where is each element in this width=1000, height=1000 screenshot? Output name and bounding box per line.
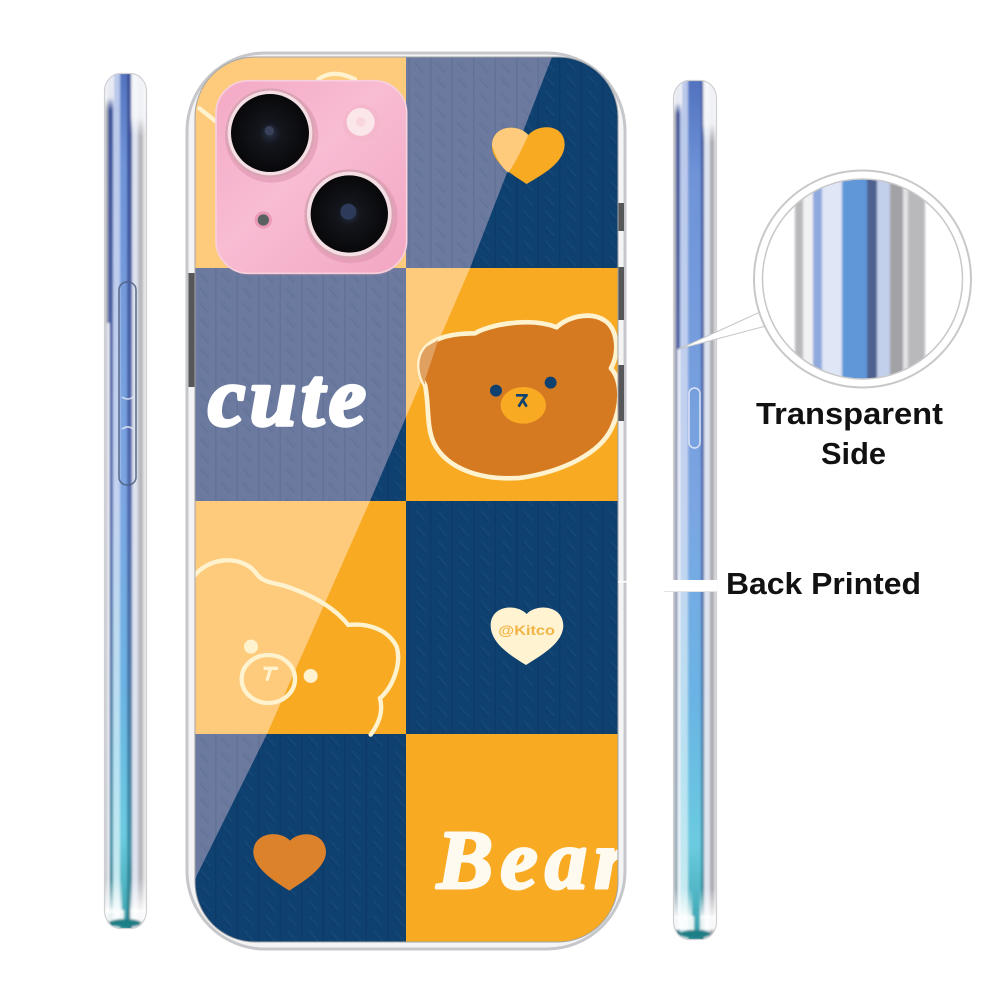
- heart: Kitco badge: @Kitco: [498, 622, 555, 638]
- snout ring: [242, 655, 295, 703]
- eyes: [490, 377, 557, 397]
- bear head face: [419, 316, 619, 478]
- cell: top right navy knit: [470, 58, 618, 268]
- camera module: [216, 81, 407, 275]
- flash: [343, 105, 380, 142]
- nose: [516, 395, 527, 407]
- glare tint on bear: [419, 340, 438, 385]
- cell: row two right orange: [406, 268, 618, 501]
- label: Transparent Side: Side: [821, 436, 886, 471]
- lens: secondary: [304, 169, 398, 263]
- printed back panel: [194, 57, 628, 942]
- cell: bottom left navy knit: [195, 734, 406, 942]
- module shadow: [217, 85, 406, 275]
- bear outline lower left: [194, 560, 398, 735]
- phone case frame: [187, 53, 625, 949]
- word: cute: cute: [208, 351, 366, 444]
- cell: top left orange: [195, 57, 406, 268]
- word: Bear: Bear: [436, 814, 628, 907]
- bear ear peeking behind camera: [199, 74, 355, 123]
- label: Back Printed: Back Printed: [726, 566, 921, 601]
- cell: row three left orange: [267, 501, 406, 734]
- cell: bottom right orange: [406, 734, 618, 942]
- side button: [689, 388, 700, 448]
- label: Transparent Side: [756, 396, 943, 471]
- label: Transparent Side: Transparent: [756, 396, 943, 431]
- print edge line: [195, 57, 618, 942]
- eyes: [244, 640, 318, 683]
- cell: row two left navy knit: [370, 417, 406, 501]
- frame buttons: [188, 203, 624, 421]
- cell: row three right navy knit: [406, 501, 618, 734]
- magnified stripes: [795, 170, 925, 390]
- callout: magnified transparent side: [679, 170, 971, 390]
- right side view of case: [672, 80, 718, 940]
- left side view of case: [104, 72, 148, 930]
- volume buttons: [119, 282, 136, 485]
- glossy diagonal reflection: [196, 58, 552, 878]
- heart: Kitco badge: [491, 607, 563, 665]
- lens: main: [225, 88, 318, 183]
- callout pointer: [679, 312, 766, 349]
- nose: [265, 668, 277, 679]
- arrow: back printed leader: [618, 580, 717, 592]
- snout: [501, 387, 546, 424]
- heart: brown bottom left: [253, 834, 326, 891]
- heart: orange top right: [492, 127, 565, 184]
- microphone dot: [255, 211, 272, 229]
